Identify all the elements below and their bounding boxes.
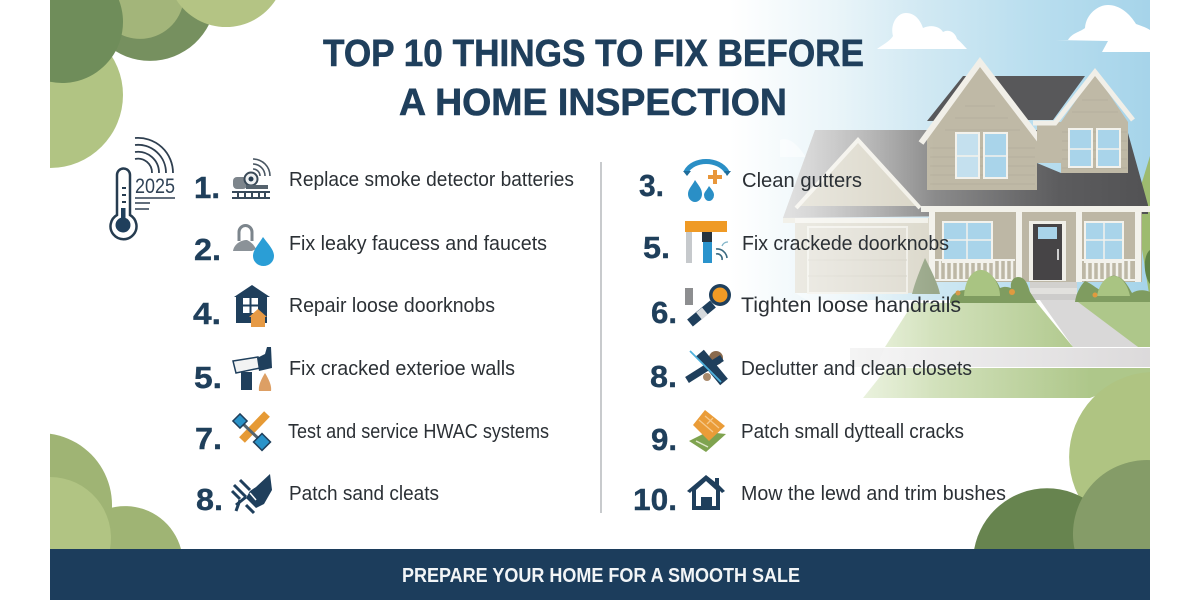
green hill bbox=[1135, 156, 1150, 300]
item 2 bbox=[194, 226, 547, 267]
shrubs left bbox=[950, 270, 1037, 303]
item text: Clean gutters bbox=[742, 170, 862, 192]
dark bush bbox=[974, 488, 1120, 549]
title: A HOME INSPECTION bbox=[399, 82, 787, 124]
garage door bbox=[808, 227, 907, 293]
main gable windows bbox=[956, 133, 1007, 178]
mid bush bbox=[1073, 460, 1150, 549]
icon: declutter tools bbox=[687, 351, 724, 382]
upper roof bbox=[927, 76, 1085, 121]
small bush bbox=[69, 506, 181, 549]
connecting wall bbox=[1037, 122, 1061, 163]
bottom left foliage bbox=[50, 434, 181, 549]
item 5 bbox=[195, 414, 549, 456]
item 4: 8. bbox=[650, 359, 677, 394]
item text: Fix leaky faucess and faucets bbox=[289, 233, 547, 255]
porch fascia bbox=[921, 206, 1150, 212]
icon: home bbox=[687, 475, 725, 510]
divider bbox=[600, 162, 602, 513]
item 4: 5. bbox=[194, 360, 222, 395]
item 1 bbox=[639, 162, 862, 203]
icon: house bbox=[234, 285, 270, 327]
item 1 bbox=[194, 159, 574, 205]
front door bbox=[1029, 221, 1066, 281]
house scene bbox=[780, 5, 1150, 398]
icon: tools crossed bbox=[233, 414, 270, 450]
item 3: 6. bbox=[651, 295, 677, 330]
icon: door frame bbox=[685, 221, 728, 263]
title: TOP 10 THINGS TO FIX BEFORE bbox=[323, 33, 864, 75]
light bush bbox=[1069, 372, 1150, 542]
item 3: 4. bbox=[193, 296, 221, 331]
icon: thermometer 2025: 2025 bbox=[135, 175, 175, 198]
icon: wrench bbox=[685, 284, 731, 323]
item text: Tighten loose handrails bbox=[741, 293, 961, 317]
back bush bbox=[50, 434, 112, 549]
tree by porch bbox=[912, 258, 940, 294]
right list bbox=[633, 162, 1006, 517]
icon: thermometer 2025 bbox=[111, 138, 175, 239]
item text: Fix cracked exterioe walls bbox=[289, 358, 515, 380]
right gable windows bbox=[1069, 129, 1120, 167]
item text: Mow the lewd and trim bushes bbox=[741, 483, 1006, 505]
item text: Repair loose doorknobs bbox=[289, 295, 495, 317]
right gable bbox=[1033, 72, 1133, 173]
item 5: 9. bbox=[651, 422, 677, 457]
dark bush bbox=[50, 0, 123, 83]
item 6 bbox=[633, 475, 1006, 517]
item 6: 8. bbox=[196, 482, 223, 517]
cloud right bbox=[1055, 5, 1150, 52]
item 1: 3. bbox=[639, 168, 664, 203]
main gable bbox=[921, 62, 1042, 190]
item text: Declutter and clean closets bbox=[741, 358, 972, 380]
item 2: 2. bbox=[194, 232, 221, 267]
porch windows bbox=[943, 222, 1123, 262]
garage gable trim bbox=[796, 140, 920, 208]
right tree edge bbox=[1145, 250, 1150, 284]
item 2: 5. bbox=[643, 230, 670, 265]
porch posts bbox=[932, 212, 1138, 282]
lawns and walkways bbox=[850, 296, 1150, 398]
left wash bbox=[783, 130, 935, 398]
item 4 bbox=[194, 347, 515, 395]
garage wall bbox=[795, 218, 930, 293]
cloud left bbox=[877, 13, 967, 49]
icon: cracked wall tool bbox=[233, 347, 272, 391]
inner bush bbox=[96, 0, 184, 39]
left list bbox=[193, 159, 574, 517]
icon: smoke detector bbox=[232, 159, 270, 198]
item text: Patch small dytteall cracks bbox=[741, 421, 964, 443]
light bush bbox=[50, 477, 111, 549]
item text: Fix crackede doorknobs bbox=[742, 233, 949, 255]
icon: patch bricks bbox=[689, 410, 726, 452]
porch railings bbox=[935, 260, 1135, 280]
bottom right foliage bbox=[974, 372, 1150, 549]
item 4 bbox=[650, 351, 972, 394]
title bbox=[323, 33, 864, 124]
item 6: 10. bbox=[633, 482, 677, 517]
icon: cleaning brush bbox=[232, 474, 272, 513]
shrubs right bbox=[1075, 276, 1150, 302]
light top bush bbox=[176, 0, 276, 27]
item 5: 7. bbox=[195, 421, 222, 456]
top left foliage bbox=[50, 0, 276, 168]
footer bar bbox=[50, 549, 1150, 600]
item 3 bbox=[193, 285, 495, 331]
item 2 bbox=[643, 221, 949, 265]
item text: Test and service HWAC systems bbox=[288, 421, 549, 443]
item 6 bbox=[196, 474, 439, 517]
porch wall bbox=[930, 212, 1142, 282]
icon: gutter drops bbox=[683, 162, 731, 202]
icon: faucet and drop bbox=[233, 226, 274, 266]
garage eave bbox=[783, 218, 928, 223]
mid bush bbox=[84, 0, 216, 61]
light bush bbox=[50, 22, 123, 168]
item 3 bbox=[651, 284, 961, 330]
item text: Replace smoke detector batteries bbox=[289, 169, 574, 191]
front steps bbox=[1030, 282, 1077, 300]
item text: Patch sand cleats bbox=[289, 483, 439, 505]
garage gable bbox=[798, 142, 918, 206]
cloud small bbox=[780, 139, 806, 157]
footer text: PREPARE YOUR HOME FOR A SMOOTH SALE bbox=[402, 565, 800, 587]
item 5 bbox=[651, 410, 964, 457]
sky bbox=[730, 0, 1150, 300]
lower roof bbox=[783, 130, 1148, 218]
item 1: 1. bbox=[194, 170, 220, 205]
